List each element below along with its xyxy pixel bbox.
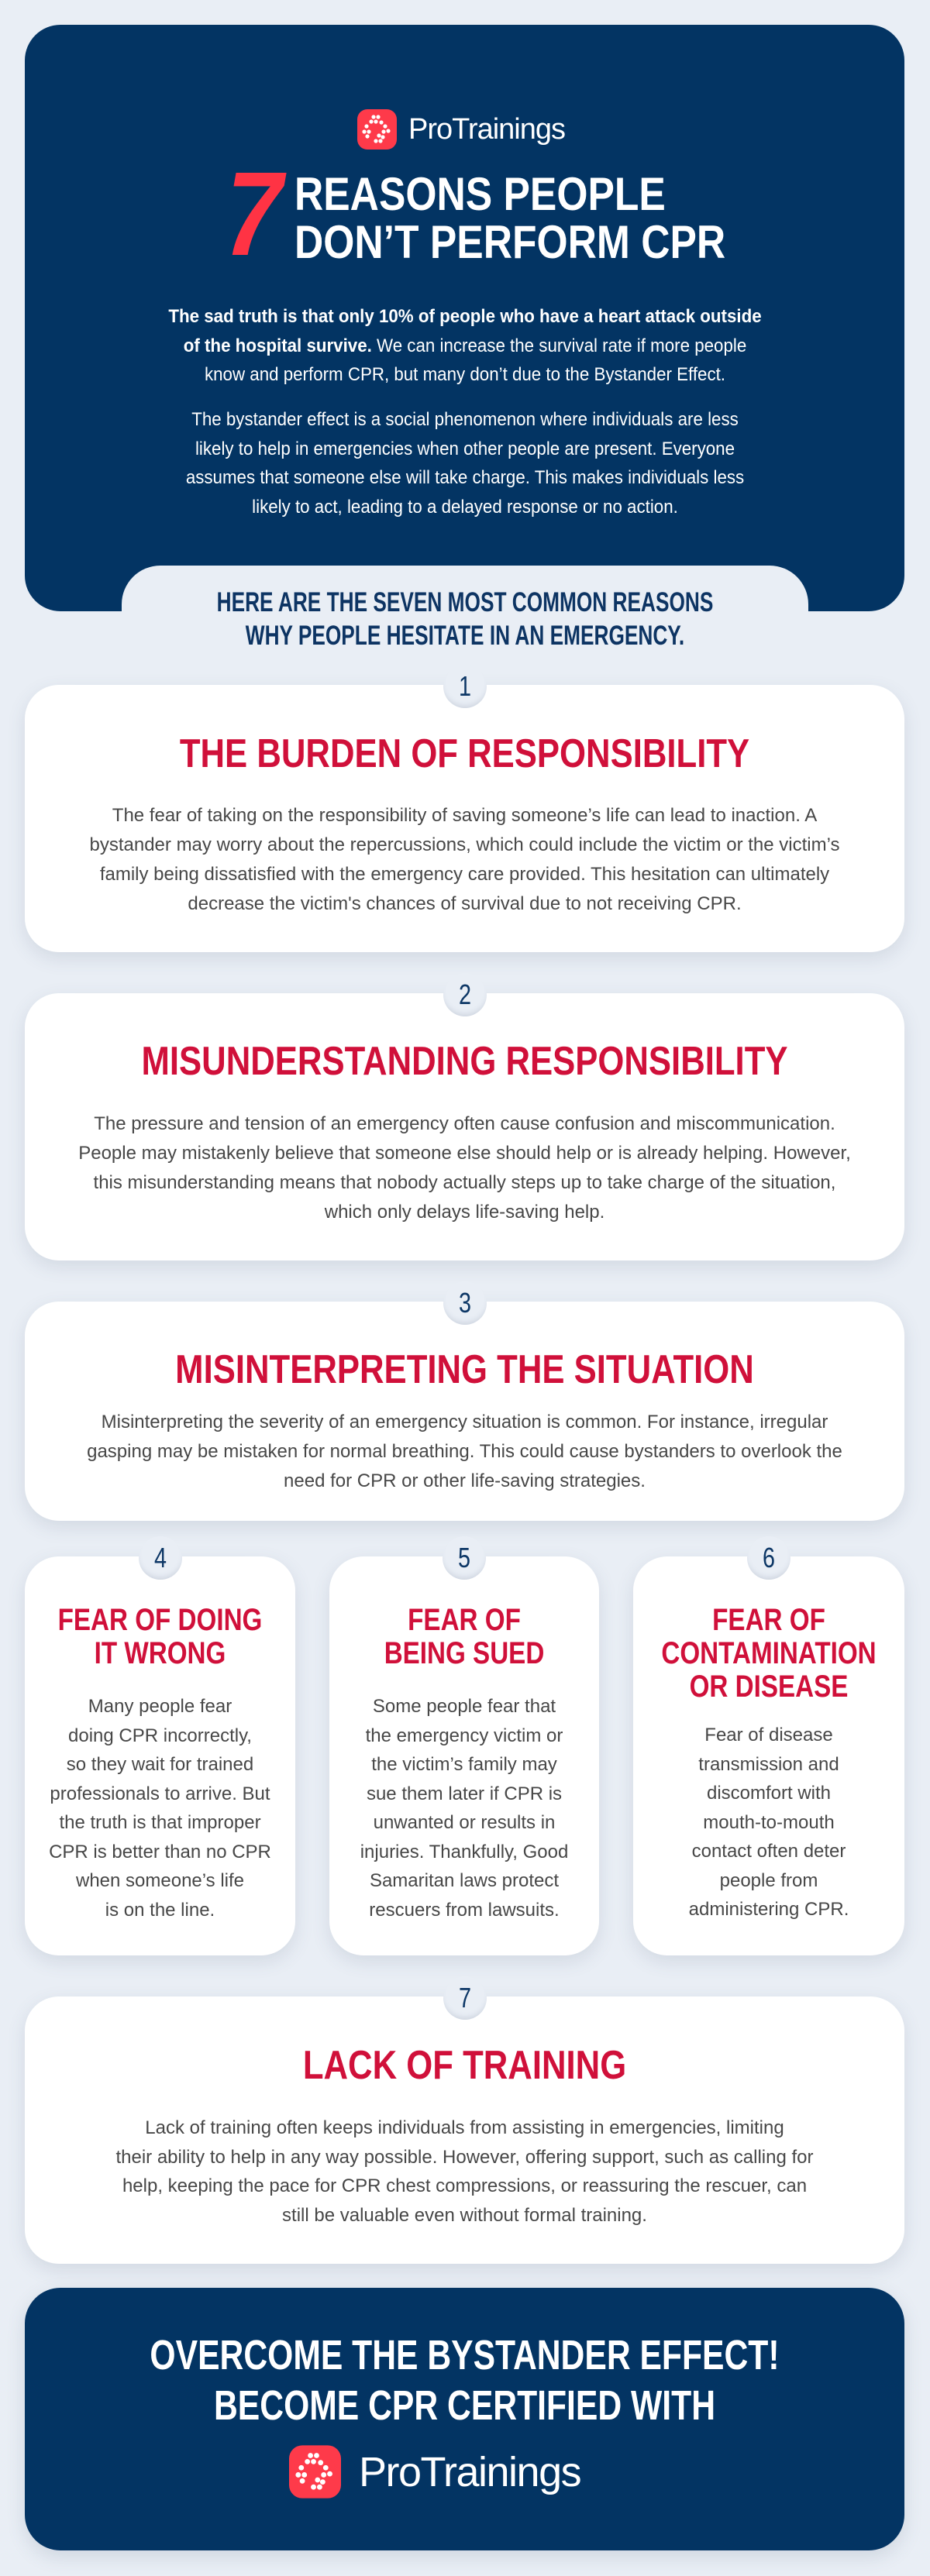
heading — [661, 1603, 877, 1704]
header panel — [25, 25, 904, 611]
heading: MISINTERPRETING THE SITUATION — [175, 1347, 754, 1392]
text block: professionals to arrive. But — [50, 1783, 270, 1804]
number 6: 6 — [763, 1542, 775, 1573]
number 5 — [443, 1536, 486, 1580]
text block: the emergency victim or — [366, 1725, 563, 1746]
panel: reason 2 — [25, 993, 904, 1260]
cta heading: BECOME CPR CERTIFIED WITH — [214, 2382, 715, 2429]
title — [212, 147, 725, 280]
text block: sue them later if CPR is — [367, 1783, 562, 1804]
text block — [78, 1113, 851, 1223]
pill: seven most common reasons: WHY PEOPLE HESITATE IN AN EMERGENCY. — [246, 621, 684, 651]
text block: so they wait for trained — [67, 1754, 253, 1775]
panel: reason 4 — [25, 1556, 295, 1955]
intro paragraph 2: likely to act, leading to a delayed response or no action. — [252, 496, 678, 518]
text block: People may mistakenly believe that someone else should help or is already helping. However, — [78, 1143, 851, 1164]
text block: mouth-to-mouth — [703, 1811, 835, 1833]
number 2 — [443, 973, 487, 1016]
text block: still be valuable even without formal training. — [282, 2205, 647, 2225]
heading: LACK OF TRAINING — [303, 2043, 626, 2088]
text block: administering CPR. — [689, 1899, 849, 1920]
panel: reason 7 — [25, 1996, 904, 2264]
heading — [384, 1603, 544, 1670]
number 4: 4 — [154, 1542, 167, 1573]
intro paragraph 1 — [168, 306, 762, 385]
intro paragraph 2: likely to help in emergencies when other people are present. Everyone — [195, 439, 735, 459]
heading: FEAR OF — [408, 1603, 521, 1637]
text block: Samaritan laws protect — [370, 1870, 559, 1891]
cta heading — [150, 2332, 780, 2429]
text block — [115, 2117, 814, 2225]
text block: help, keeping the pace for CPR chest compressions, or reassuring the rescuer, can — [122, 2175, 807, 2196]
heading: FEAR OF DOING — [58, 1603, 262, 1637]
cta heading: OVERCOME THE BYSTANDER EFFECT! — [150, 2332, 780, 2378]
number 7 — [443, 1976, 487, 2020]
text block — [90, 805, 839, 914]
logo text: ProTrainings — [359, 2449, 580, 2495]
intro paragraph 2 — [186, 409, 744, 518]
pill: seven most common reasons: HERE ARE THE SEVEN MOST COMMON REASONS — [217, 587, 713, 617]
number 2: 2 — [459, 978, 471, 1010]
text block: injuries. Thankfully, Good — [360, 1841, 568, 1862]
text block: discomfort with — [707, 1783, 831, 1804]
text block: Many people fear — [88, 1696, 232, 1717]
intro paragraph 1: know and perform CPR, but many don’t due to the Bystander Effect. — [205, 364, 725, 385]
text block: The fear of taking on the responsibility of saving someone’s life can lead to inaction. A — [112, 805, 817, 826]
text block: CPR is better than no CPR — [49, 1841, 271, 1862]
intro paragraph 2: The bystander effect is a social phenomenon where individuals are less — [191, 409, 739, 430]
text block: doing CPR incorrectly, — [68, 1725, 252, 1746]
text block: the truth is that improper — [59, 1812, 261, 1833]
intro paragraph 1: The sad truth is that only 10% of people who have a heart attack outside — [168, 306, 762, 327]
number 7: 7 — [459, 1982, 471, 2014]
heading: BEING SUED — [384, 1636, 544, 1670]
text block: this misunderstanding means that nobody actually steps up to take charge of the situation, — [94, 1172, 835, 1193]
text block: Some people fear that — [373, 1696, 556, 1717]
text block: Misinterpreting the severity of an emergency situation is common. For instance, irregular — [102, 1412, 828, 1432]
heading: IT WRONG — [95, 1636, 226, 1670]
number 5: 5 — [458, 1542, 470, 1573]
heading: OR DISEASE — [690, 1670, 848, 1704]
heading: THE BURDEN OF RESPONSIBILITY — [180, 731, 749, 776]
logo text: ProTrainings — [408, 113, 565, 146]
title text: REASONS PEOPLE — [294, 168, 666, 220]
text block: Fear of disease — [704, 1725, 833, 1745]
title text: DON’T PERFORM CPR — [294, 216, 725, 268]
text block: the victim’s family may — [371, 1754, 557, 1775]
text block: bystander may worry about the repercussions, which could include the victim or the victim’s — [90, 834, 839, 855]
text block: is on the line. — [105, 1900, 215, 1920]
heading: MISUNDERSTANDING RESPONSIBILITY — [141, 1039, 788, 1084]
number 3: 3 — [459, 1287, 471, 1319]
text block — [49, 1696, 271, 1920]
heading — [58, 1603, 262, 1670]
number 6 — [747, 1536, 790, 1580]
text block — [689, 1725, 849, 1920]
panel: call to action — [25, 2288, 904, 2550]
text block: gasping may be mistaken for normal breathing. This could cause bystanders to overlook the — [87, 1441, 842, 1462]
text block: contact often deter — [692, 1841, 846, 1862]
intro paragraph 1: of the hospital survive. We can increase the survival rate if more people — [184, 335, 746, 356]
text block: unwanted or results in — [374, 1812, 555, 1833]
panel: reason 6 — [633, 1556, 904, 1955]
text block: rescuers from lawsuits. — [369, 1900, 560, 1920]
text block: when someone’s life — [76, 1870, 244, 1891]
number 4 — [139, 1536, 182, 1580]
logo: header — [357, 109, 565, 150]
big red 7: 7 — [212, 147, 296, 280]
text block: family being dissatisfied with the emergency care provided. This hesitation can ultimately — [100, 864, 829, 885]
pill: seven most common reasons — [122, 566, 808, 659]
intro paragraph 2: assumes that someone else will take charge. This makes individuals less — [186, 467, 744, 488]
text block: need for CPR or other life-saving strategies. — [284, 1470, 646, 1491]
heading: CONTAMINATION — [661, 1636, 877, 1670]
panel: reason 1 — [25, 685, 904, 952]
logo: footer — [289, 2445, 580, 2499]
text block — [87, 1412, 842, 1491]
text block: transmission and — [698, 1754, 839, 1774]
heading: FEAR OF — [712, 1603, 825, 1637]
number 3 — [443, 1281, 487, 1325]
icon: protrainings logo — [357, 109, 397, 150]
text block: decrease the victim's chances of survival due to not receiving CPR. — [188, 893, 742, 914]
panel: reason 3 — [25, 1302, 904, 1521]
text block: their ability to help in any way possible. However, offering support, such as calling for — [115, 2146, 814, 2168]
text block: which only delays life-saving help. — [325, 1202, 604, 1223]
panel: reason 5 — [329, 1556, 599, 1955]
text block: The pressure and tension of an emergency often cause confusion and miscommunication. — [94, 1113, 835, 1134]
text block: people from — [720, 1870, 818, 1890]
icon: protrainings logo — [289, 2445, 341, 2499]
number 1 — [443, 665, 487, 708]
number 1: 1 — [459, 670, 471, 702]
text block — [360, 1696, 568, 1920]
text block: Lack of training often keeps individuals from assisting in emergencies, limiting — [145, 2117, 784, 2138]
title text — [294, 168, 725, 268]
